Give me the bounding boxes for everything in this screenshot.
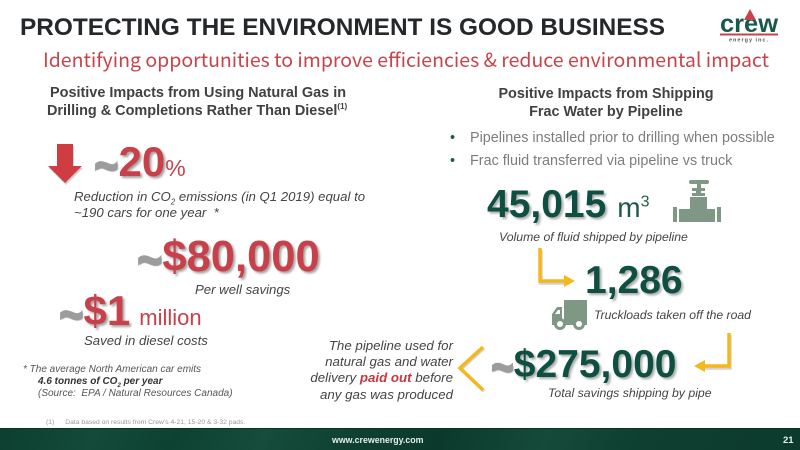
- stat: ~$1 million: ~: [59, 284, 84, 345]
- left panel heading: [47, 85, 347, 119]
- car footnote: 4.6 tonnes of CO2 per year: [38, 376, 162, 389]
- bullet list: •: [450, 153, 455, 169]
- footnote: (1) Data based on results from Crew’s 4-21, 15-20 & 3-32 pads.: [46, 419, 245, 426]
- stat: ~20%: 20%: [119, 138, 186, 185]
- caption: total savings: Total savings shipping by pipe: [548, 386, 712, 400]
- bullet list: [450, 130, 775, 169]
- left panel heading: Positive Impacts from Using Natural Gas in: [50, 85, 346, 101]
- stat: 1,286: 1,286: [585, 259, 683, 302]
- stat: ~$1 million: $1 million: [84, 287, 202, 334]
- arrow: yellow chevron: [458, 346, 485, 392]
- left panel heading: Drilling & Completions Rather Than Diesel(1): [47, 102, 347, 119]
- footer band: [0, 428, 800, 450]
- stat: 45,015 m3: 45,015 m3: [487, 183, 650, 226]
- pipeline paid-out note: natural gas and water: [325, 354, 453, 369]
- logo: crew energy inc.: energy inc.: [729, 38, 769, 44]
- caption: CO2 reduction: Reduction in CO2 emissions (in Q1 2019) equal to: [74, 189, 365, 207]
- stat: ~$1 million: [59, 284, 202, 345]
- right panel heading: Frac Water by Pipeline: [529, 104, 683, 120]
- stat: ~$275,000: $275,000: [514, 343, 676, 386]
- arrow: yellow to 1,286: [538, 248, 575, 287]
- stat: ~$80,000: $80,000: [162, 233, 320, 281]
- car footnote: [23, 364, 233, 399]
- arrow: yellow to savings: [694, 333, 732, 372]
- website url: www.crewenergy.com: [332, 435, 423, 445]
- right panel heading: Positive Impacts from Shipping: [498, 86, 714, 102]
- icon: truck: [552, 300, 587, 330]
- caption: saved in diesel costs: Saved in diesel costs: [84, 333, 208, 348]
- car footnote: (Source: EPA / Natural Resources Canada): [38, 388, 233, 399]
- subtitle: Identifying opportunities to improve efficiencies & reduce environmental impact: [43, 44, 769, 73]
- icon: pipe valve: [673, 180, 721, 222]
- bullet list: Pipelines installed prior to drilling when possible: [470, 130, 775, 146]
- caption: CO2 reduction: ~190 cars for one year *: [74, 205, 219, 220]
- right panel heading: [498, 86, 714, 120]
- bullet list: •: [450, 130, 455, 146]
- title: PROTECTING THE ENVIRONMENT IS GOOD BUSINESS: [20, 14, 665, 41]
- caption: volume of fluid: Volume of fluid shipped by pipeline: [499, 230, 688, 244]
- caption: CO2 reduction: [74, 189, 365, 220]
- stat: ~$80,000: [137, 230, 322, 292]
- pipeline paid-out note: The pipeline used for: [329, 338, 453, 353]
- bullet list: Frac fluid transferred via pipeline vs truck: [470, 153, 732, 169]
- page number: 21: [783, 435, 794, 446]
- logo: crew energy inc.: crew: [720, 10, 779, 38]
- icon: red down arrow: [48, 144, 83, 185]
- caption: truckloads: Truckloads taken off the road: [594, 308, 751, 322]
- stat: ~$275,000: [491, 340, 678, 396]
- stat: ~20%: [94, 135, 186, 196]
- pipeline paid-out note: any gas was produced: [320, 387, 453, 402]
- car footnote: * The average North American car emits: [23, 364, 201, 375]
- stat: ~$80,000: ~: [137, 230, 162, 292]
- caption: per well savings: Per well savings: [195, 282, 290, 297]
- stat: ~$275,000: ~: [491, 340, 514, 396]
- pipeline paid-out note: [310, 338, 454, 402]
- stat: ~20%: ~: [94, 135, 119, 196]
- pipeline paid-out note: delivery paid out before: [310, 370, 453, 385]
